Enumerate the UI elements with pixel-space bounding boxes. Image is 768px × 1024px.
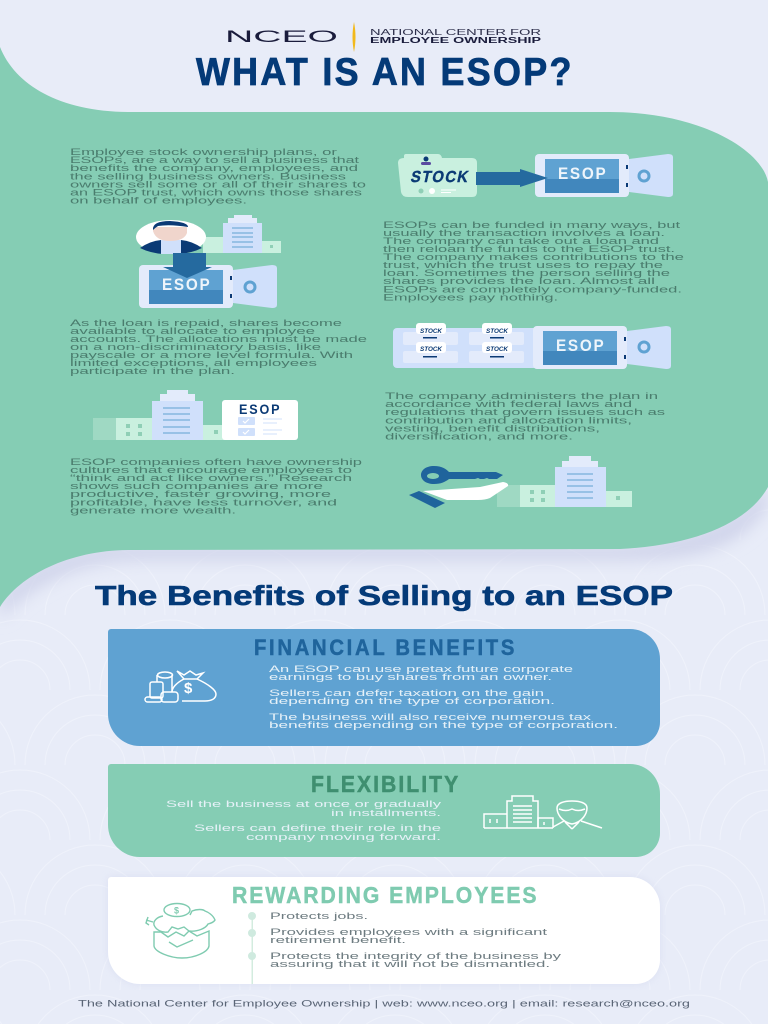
panel: financial benefits — [108, 629, 660, 746]
text block: ownership culture: productive, faster growing, more — [70, 489, 331, 499]
icon: piggy bank and shield — [146, 904, 215, 958]
text block: administration: accordance with federal laws and — [385, 399, 632, 409]
text block: ownership culture: generate more wealth. — [70, 506, 236, 516]
text block: funding: ESOPs are completely company-funded. — [383, 284, 682, 294]
text: rewarding employees: Protects jobs. — [270, 911, 368, 921]
text block: administration — [385, 391, 666, 442]
text block: administration: vesting, benefit distributions, — [385, 424, 600, 434]
illustration: stock into ESOP safe: ESOP — [558, 164, 606, 183]
text block: ownership culture: profitable, have less turnover, and — [70, 498, 337, 508]
text block: intro: the selling business owners. Business — [70, 172, 347, 182]
text block: allocation: payscale or a more level formula. With — [70, 350, 353, 360]
text block: ownership culture: ESOP companies often have ownership — [70, 457, 362, 467]
illustration: stock cards in ESOP safe: STOCK — [486, 328, 509, 335]
text block: intro — [70, 147, 366, 206]
logo: NCEO — [225, 22, 542, 52]
text block: ownership culture: cultures that encourage employees to — [70, 465, 352, 475]
panel: green what-is-an-ESOP background — [0, 47, 768, 607]
text block: administration: regulations that govern issues such as — [385, 407, 666, 417]
illustration: stock into ESOP safe: STOCK — [409, 169, 471, 186]
text: financial benefits — [269, 664, 618, 730]
text block: allocation: on a non-discriminatory basis, like — [70, 342, 321, 352]
text block: funding: The company can take out a loan and — [383, 236, 659, 246]
text block: funding: usually the transaction involves a loan. — [383, 228, 665, 238]
text block: funding: The company makes contributions to the — [383, 252, 684, 262]
text block: allocation: available to allocate to employee — [70, 326, 315, 336]
text: financial benefits: depending on the type of corporation. — [269, 696, 555, 706]
heading: financial benefits: FINANCIAL BENEFITS — [254, 636, 514, 660]
text: flexibility: company moving forward. — [246, 832, 441, 842]
text: financial benefits: The business will also receive numerous tax — [269, 712, 592, 722]
text block: administration: diversification, and more. — [385, 432, 573, 442]
text: financial benefits: earnings to buy shares from an owner. — [269, 672, 552, 682]
panel: flexibility — [108, 764, 660, 857]
illustration: employee and building into ESOP safe — [136, 215, 281, 308]
text: rewarding employees: Protects the integrity of the business by — [270, 951, 562, 961]
text: flexibility: Sell the business at once or gradually — [166, 799, 442, 809]
illustration: stock cards in ESOP safe: STOCK — [486, 346, 509, 353]
illustration: stock cards in ESOP safe: ESOP — [556, 336, 604, 355]
illustration: stock cards in ESOP safe: STOCK — [420, 346, 443, 353]
timeline: bullets — [248, 912, 256, 984]
text block: ownership culture: shows such companies are more — [70, 481, 323, 491]
text: flexibility — [166, 799, 442, 842]
text: rewarding employees — [270, 911, 562, 969]
text block: intro: owners sell some or all of their shares to — [70, 180, 366, 190]
text block: funding: ESOPs can be funded in many ways, but — [383, 220, 681, 230]
text block: funding: then reloan the funds to the ESOP trust. — [383, 244, 675, 254]
logo: NCEO: EMPLOYEE OWNERSHIP — [370, 36, 542, 45]
text: rewarding employees: Provides employees with a significant — [270, 927, 548, 937]
illustration: stock cards in ESOP safe — [393, 323, 671, 369]
text block: allocation: limited exceptions, all employees — [70, 358, 318, 368]
text: rewarding employees: retirement benefit. — [270, 935, 406, 945]
text: financial benefits: An ESOP can use pretax future corporate — [269, 664, 573, 674]
illustration: stock cards in ESOP safe: STOCK — [420, 328, 443, 335]
text block: intro: on behalf of employees. — [70, 196, 247, 206]
heading: rewarding employees: REWARDING EMPLOYEES — [232, 882, 537, 908]
text: rewarding employees: assuring that it will not be dismantled. — [270, 959, 550, 969]
heading: flexibility: FLEXIBILITY — [311, 771, 458, 797]
text block: administration: contribution and allocation limits, — [385, 416, 632, 426]
text block: funding: Employees pay nothing. — [383, 292, 558, 302]
text: financial benefits: Sellers can defer taxation on the gain — [269, 688, 544, 698]
text: flexibility: in installments. — [331, 808, 441, 818]
logo: NCEO: NCEO — [225, 27, 338, 46]
logo: NCEO: NATIONAL CENTER FOR — [370, 28, 541, 37]
text block: intro: ESOPs, are a way to sell a business that — [70, 155, 360, 165]
icon: money bag and coins: $ — [184, 680, 193, 697]
icon: buildings and person — [484, 796, 602, 829]
illustration: building and ESOP checklist: ESOP — [239, 401, 280, 417]
panel: rewarding employees — [108, 877, 660, 984]
text block: intro: benefits the company, employees, and — [70, 163, 358, 173]
text block: funding: trust, which the trust uses to repay the — [383, 260, 663, 270]
illustration: key in hand and building — [409, 456, 632, 508]
illustration: building and ESOP checklist — [93, 390, 298, 440]
text block: funding — [383, 220, 684, 302]
text block: funding: shares provides the loan. Almost all — [383, 276, 655, 286]
text block: ownership culture — [70, 457, 362, 516]
text block: funding: loan. Sometimes the person selling the — [383, 268, 670, 278]
text block: administration: The company administers the plan in — [385, 391, 658, 401]
icon: piggy bank and shield: $ — [174, 906, 179, 916]
text block: ownership culture: “think and act like owners.” Research — [70, 473, 352, 483]
illustration: employee and building into ESOP safe: ESOP — [162, 275, 210, 294]
text block: allocation — [70, 318, 367, 376]
text block: intro: an ESOP trust, which owns those shares — [70, 188, 363, 198]
illustration: stock into ESOP safe — [398, 154, 673, 197]
footer: The National Center for Employee Ownership | web: www.nceo.org | email: research@nceo.org — [78, 998, 690, 1008]
heading: the benefits: The Benefits of Selling to an ESOP — [95, 580, 673, 611]
text: financial benefits: benefits depending on the type of corporation. — [269, 720, 618, 730]
text block: intro: Employee stock ownership plans, or — [70, 147, 337, 157]
text block: allocation: accounts. The allocations must be made — [70, 334, 367, 344]
text block: allocation: participate in the plan. — [70, 366, 235, 376]
text block: allocation: As the loan is repaid, shares become — [70, 318, 342, 328]
icon: money bag and coins — [145, 671, 216, 702]
text: flexibility: Sellers can define their role in the — [194, 823, 441, 833]
title: WHAT IS AN ESOP? — [196, 50, 571, 93]
